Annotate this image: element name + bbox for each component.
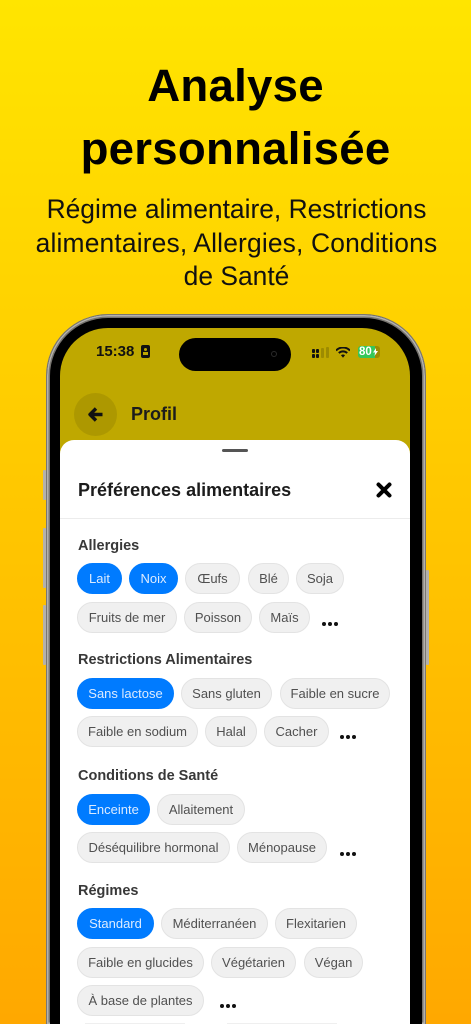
chips: allergies: Poisson bbox=[195, 610, 241, 625]
dynamic island bbox=[179, 338, 291, 371]
subtitle: Régime alimentaire, Restrictions bbox=[47, 194, 426, 224]
title: Analyse bbox=[147, 60, 324, 111]
chips: restrictions: Faible en sodium bbox=[88, 724, 187, 739]
sheet title: Préférences alimentaires bbox=[78, 480, 291, 500]
section: regimes bbox=[77, 883, 363, 1024]
section: conditions bbox=[77, 768, 356, 863]
icon: back arrow bbox=[88, 407, 102, 422]
icon: signal bbox=[312, 347, 329, 358]
chips: regimes: Faible en glucides bbox=[88, 955, 193, 970]
divider bbox=[60, 518, 410, 519]
chips: restrictions: Cacher bbox=[276, 724, 317, 739]
chips: allergies: Maïs bbox=[270, 610, 299, 625]
chips: restrictions: Sans gluten bbox=[192, 686, 261, 701]
chips: allergies: Fruits de mer bbox=[89, 610, 165, 625]
bottom sheet bbox=[60, 440, 410, 1024]
chips: conditions: Allaitement bbox=[169, 802, 233, 817]
icon: wifi bbox=[336, 347, 350, 358]
chips: restrictions: Faible en sucre bbox=[291, 686, 379, 701]
chips: next row, cut off bbox=[85, 1023, 337, 1024]
sheet handle bbox=[222, 449, 248, 452]
heading: conditions: Conditions de Santé bbox=[78, 768, 218, 784]
chips: allergies: Œufs bbox=[197, 571, 228, 586]
chips: regimes: Flexitarien bbox=[286, 916, 346, 931]
heading: allergies: Allergies bbox=[78, 538, 139, 554]
heading: restrictions: Restrictions Alimentaires bbox=[78, 652, 252, 668]
title: personnalisée bbox=[81, 123, 390, 174]
chips: regimes: Méditerranéen bbox=[173, 916, 256, 931]
header title: Profil bbox=[131, 404, 177, 424]
chips: conditions: Enceinte bbox=[88, 802, 139, 817]
icon: battery: 80 bbox=[359, 346, 372, 358]
icon: close bbox=[376, 482, 392, 498]
chips: allergies: Noix bbox=[140, 571, 166, 586]
chips: allergies: Blé bbox=[259, 571, 278, 586]
chips: regimes: À base de plantes bbox=[88, 993, 193, 1008]
chips: conditions bbox=[77, 794, 356, 863]
chips: restrictions: Halal bbox=[216, 724, 246, 739]
screen bbox=[60, 328, 410, 1024]
chips: allergies: Soja bbox=[307, 571, 333, 586]
section: restrictions bbox=[77, 652, 390, 747]
chips: allergies: Lait bbox=[89, 571, 110, 586]
section: allergies bbox=[77, 538, 344, 633]
chips: regimes: Végétarien bbox=[222, 955, 285, 970]
chips: conditions: Déséquilibre hormonal bbox=[88, 840, 219, 855]
status time: 15:38 bbox=[96, 343, 134, 360]
chips: allergies bbox=[77, 563, 344, 633]
chips: regimes: Végan bbox=[315, 955, 352, 970]
chips: regimes: Standard bbox=[89, 916, 142, 931]
icon: battery bbox=[358, 346, 380, 358]
heading: regimes: Régimes bbox=[78, 883, 138, 899]
phone side buttons bbox=[43, 470, 429, 665]
phone frame bbox=[46, 314, 426, 1024]
back button bbox=[74, 393, 117, 436]
icon: id card bbox=[141, 345, 150, 358]
chips: regimes bbox=[77, 908, 363, 1024]
chips: restrictions bbox=[77, 678, 390, 747]
subtitle bbox=[36, 194, 437, 291]
chips: restrictions: Sans lactose bbox=[88, 686, 163, 701]
subtitle: de Santé bbox=[184, 261, 289, 291]
subtitle: alimentaires, Allergies, Conditions bbox=[36, 228, 437, 258]
chips: conditions: Ménopause bbox=[248, 840, 316, 855]
title bbox=[81, 60, 390, 174]
